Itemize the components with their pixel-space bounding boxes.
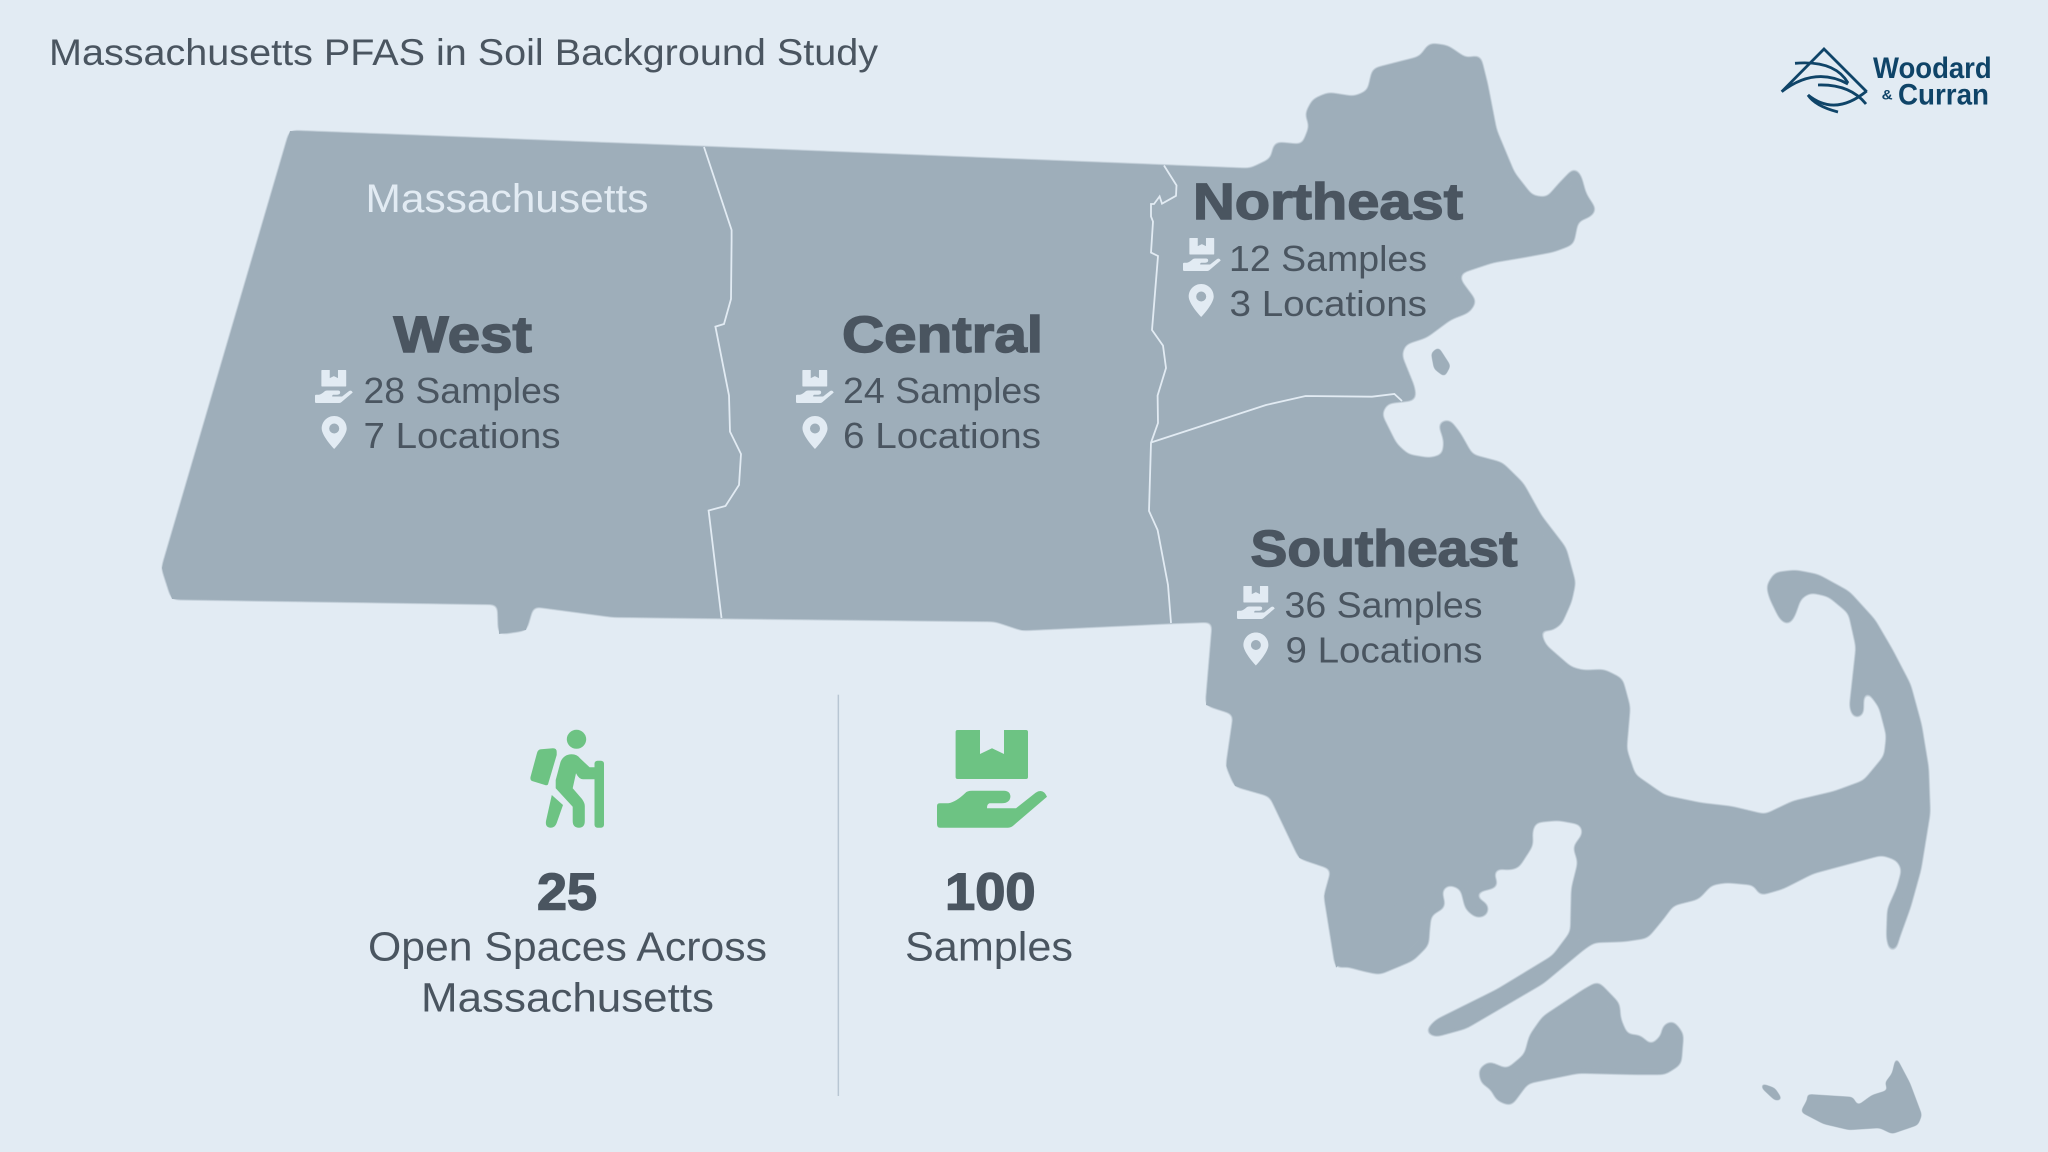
map label: Massachusetts: Massachusetts bbox=[366, 177, 648, 221]
map: regional boundaries bbox=[704, 147, 1402, 623]
icon: location pin bbox=[1243, 632, 1268, 666]
region: Central bbox=[796, 306, 1043, 456]
logo: Woodard & Curran bbox=[1782, 49, 1992, 112]
text: locations: 3 Locations bbox=[1230, 283, 1427, 324]
icon: hand with box bbox=[937, 730, 1047, 828]
stat: 25 open spaces bbox=[368, 730, 767, 1021]
logo text: Curran: Curran bbox=[1898, 79, 1989, 112]
icon: hand with box bbox=[1237, 586, 1275, 619]
icon: hand with box bbox=[1183, 238, 1221, 271]
icon: location pin bbox=[802, 416, 828, 449]
region: West bbox=[315, 306, 560, 456]
region: Northeast bbox=[1183, 173, 1463, 324]
region: Southeast bbox=[1237, 520, 1518, 670]
icon: hand with box bbox=[315, 370, 353, 403]
stat: 100 samples bbox=[905, 730, 1073, 970]
heading: Northeast: Northeast bbox=[1193, 173, 1463, 230]
logo text: ampersand: & bbox=[1882, 86, 1893, 102]
map: Nantucket bbox=[1800, 1056, 1922, 1134]
title: Massachusetts PFAS in Soil Background Study bbox=[49, 32, 879, 73]
heading: Central: Central bbox=[842, 306, 1043, 363]
icon: hiker bbox=[530, 730, 604, 828]
number: 25: 25 bbox=[537, 864, 597, 922]
map: sharp-cornered straight borders bbox=[162, 131, 1400, 968]
text: locations: 6 Locations bbox=[843, 415, 1041, 456]
text: locations: 9 Locations bbox=[1286, 630, 1482, 670]
logo text: Woodard: Woodard bbox=[1873, 52, 1992, 85]
icon: location pin bbox=[1189, 284, 1214, 317]
icon: location pin bbox=[322, 416, 347, 449]
text: Open Spaces Across Massachusetts: Open Spaces Across bbox=[368, 924, 767, 970]
text: Open Spaces Across Massachusetts: Massachusetts bbox=[421, 975, 714, 1021]
text: Samples: Samples bbox=[905, 924, 1073, 970]
text: samples: 24 Samples bbox=[843, 370, 1041, 411]
text: samples: 12 Samples bbox=[1229, 238, 1427, 279]
number: 100: 100 bbox=[945, 864, 1036, 922]
logo mark bbox=[1782, 49, 1867, 112]
text: samples: 36 Samples bbox=[1284, 584, 1482, 626]
icon: hand with box bbox=[796, 370, 834, 403]
text: samples: 28 Samples bbox=[364, 370, 560, 411]
divider bbox=[838, 695, 839, 1096]
text: locations: 7 Locations bbox=[364, 415, 560, 456]
heading: West: West bbox=[394, 306, 532, 363]
text: Open Spaces Across Massachusetts bbox=[368, 924, 767, 1021]
heading: Southeast: Southeast bbox=[1250, 520, 1518, 577]
map: Tuckernuck island bbox=[1761, 1083, 1783, 1101]
map: Martha's Vineyard bbox=[1479, 982, 1683, 1106]
map: mainland and Cape Cod bbox=[162, 44, 1930, 1036]
map: Thompson island bbox=[1431, 347, 1451, 377]
